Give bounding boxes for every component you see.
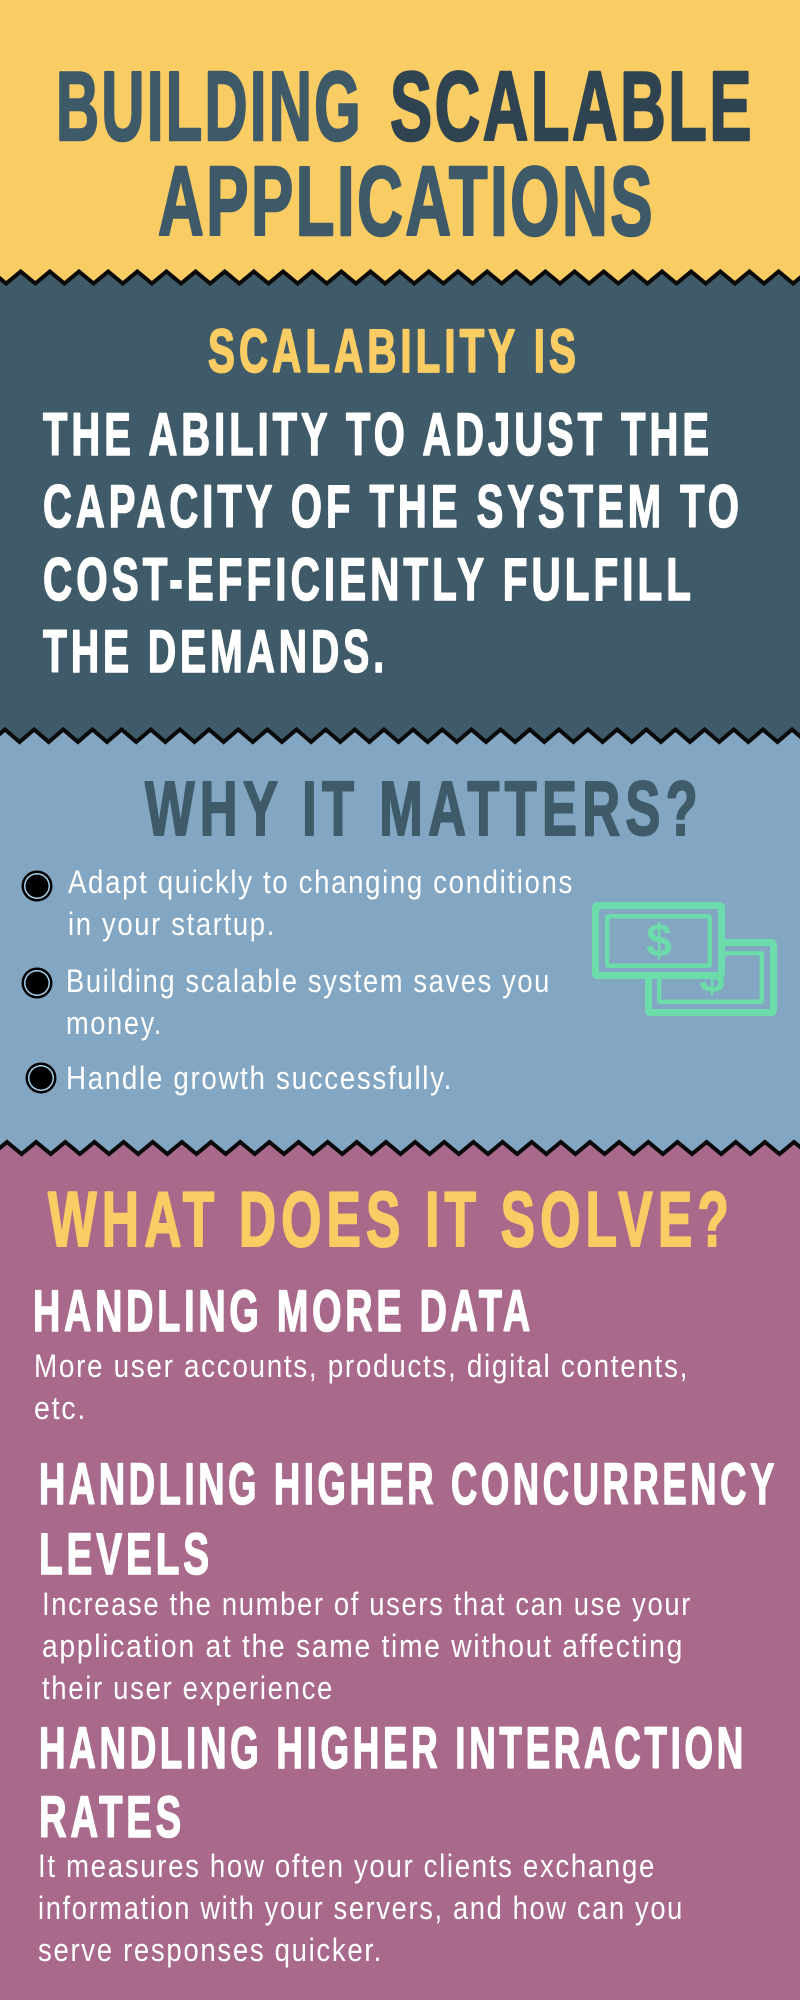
subheading: handling higher concurrency levels: LEVELS bbox=[39, 1522, 213, 1587]
panel: scalability definition bbox=[0, 272, 800, 750]
panel: what does it solve bbox=[0, 1142, 800, 2000]
bullet item: adapt quickly: Adapt quickly to changing conditions bbox=[68, 864, 574, 900]
text block: concurrency description bbox=[42, 1586, 692, 1706]
text block: concurrency description: application at the same time without affecting bbox=[42, 1628, 684, 1664]
title: BUILDING bbox=[56, 51, 363, 161]
text block: more data description: etc. bbox=[34, 1390, 87, 1426]
subheading: handling more data: HANDLING MORE DATA bbox=[33, 1279, 534, 1344]
bullet item: handle growth: Handle growth successfully. bbox=[66, 1060, 453, 1096]
icon: money bills bbox=[596, 906, 774, 1012]
subheading: handling higher concurrency levels bbox=[39, 1452, 778, 1587]
text block: more data description: More user accounts, products, digital contents, bbox=[34, 1348, 689, 1384]
bullet item: saves money: Building scalable system saves you bbox=[66, 963, 551, 999]
text block: interaction description: serve responses quicker. bbox=[38, 1932, 383, 1968]
bullet item: saves money bbox=[22, 963, 551, 1041]
text block: concurrency description: their user experience bbox=[42, 1670, 334, 1706]
text block: interaction description: It measures how often your clients exchange bbox=[38, 1848, 656, 1884]
subheading: handling higher interaction rates bbox=[39, 1716, 747, 1850]
heading: scalability is: SCALABILITY IS bbox=[208, 317, 580, 385]
bullet item: adapt quickly: in your startup. bbox=[68, 906, 276, 942]
title bbox=[56, 51, 754, 256]
text block: more data description bbox=[34, 1348, 689, 1426]
icon: money bills: $ bbox=[646, 914, 672, 966]
icon: money bills: $ bbox=[699, 950, 725, 1002]
text block: concurrency description: Increase the number of users that can use your bbox=[42, 1586, 692, 1622]
panel: why it matters bbox=[0, 730, 800, 1160]
text block: interaction description bbox=[38, 1848, 684, 1968]
panel: header bbox=[0, 0, 800, 290]
text block: interaction description: information with your servers, and how can you bbox=[38, 1890, 684, 1926]
bullet item: adapt quickly bbox=[22, 864, 574, 942]
subheading: handling higher interaction rates: RATES bbox=[39, 1785, 185, 1850]
text block: definition bbox=[43, 401, 743, 685]
text block: definition: THE DEMANDS. bbox=[43, 618, 388, 685]
bullet item: saves money: money. bbox=[66, 1005, 163, 1041]
